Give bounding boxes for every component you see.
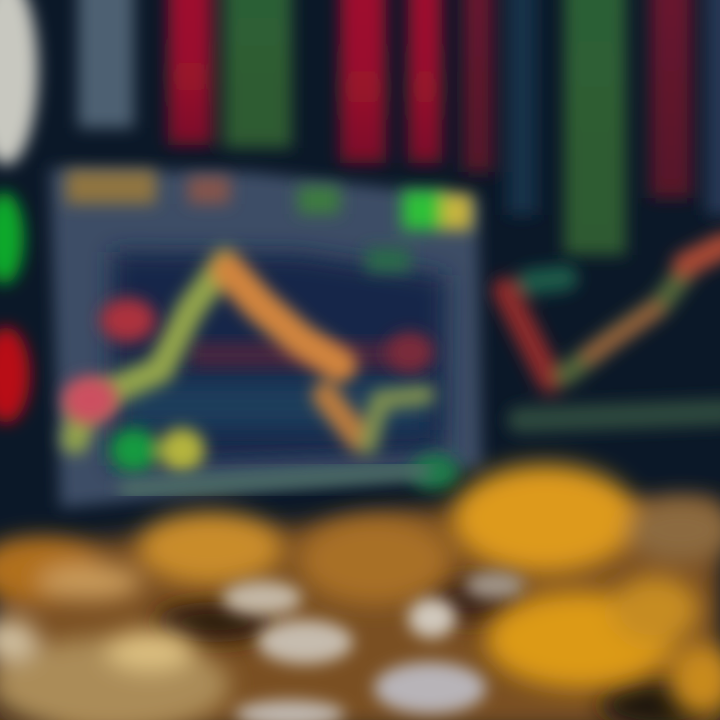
right background chart line bbox=[505, 245, 720, 420]
panel frame bbox=[50, 168, 482, 508]
gold coin pile bbox=[0, 464, 720, 720]
chart markers bbox=[62, 298, 459, 490]
silver coins bbox=[222, 571, 525, 720]
panel header labels bbox=[66, 170, 472, 272]
panel plot area bbox=[112, 252, 446, 466]
left edge indicator lights bbox=[0, 192, 30, 423]
pile base bbox=[0, 500, 720, 720]
background candlestick stripes bbox=[0, 0, 720, 255]
gold coins bbox=[0, 464, 720, 720]
plot band red bbox=[190, 342, 420, 368]
main chart line bbox=[75, 262, 425, 445]
chart panel bbox=[50, 168, 482, 508]
panel bottom strip bbox=[120, 470, 430, 490]
dark shadow gaps bbox=[0, 578, 720, 720]
plot band bbox=[120, 380, 430, 430]
